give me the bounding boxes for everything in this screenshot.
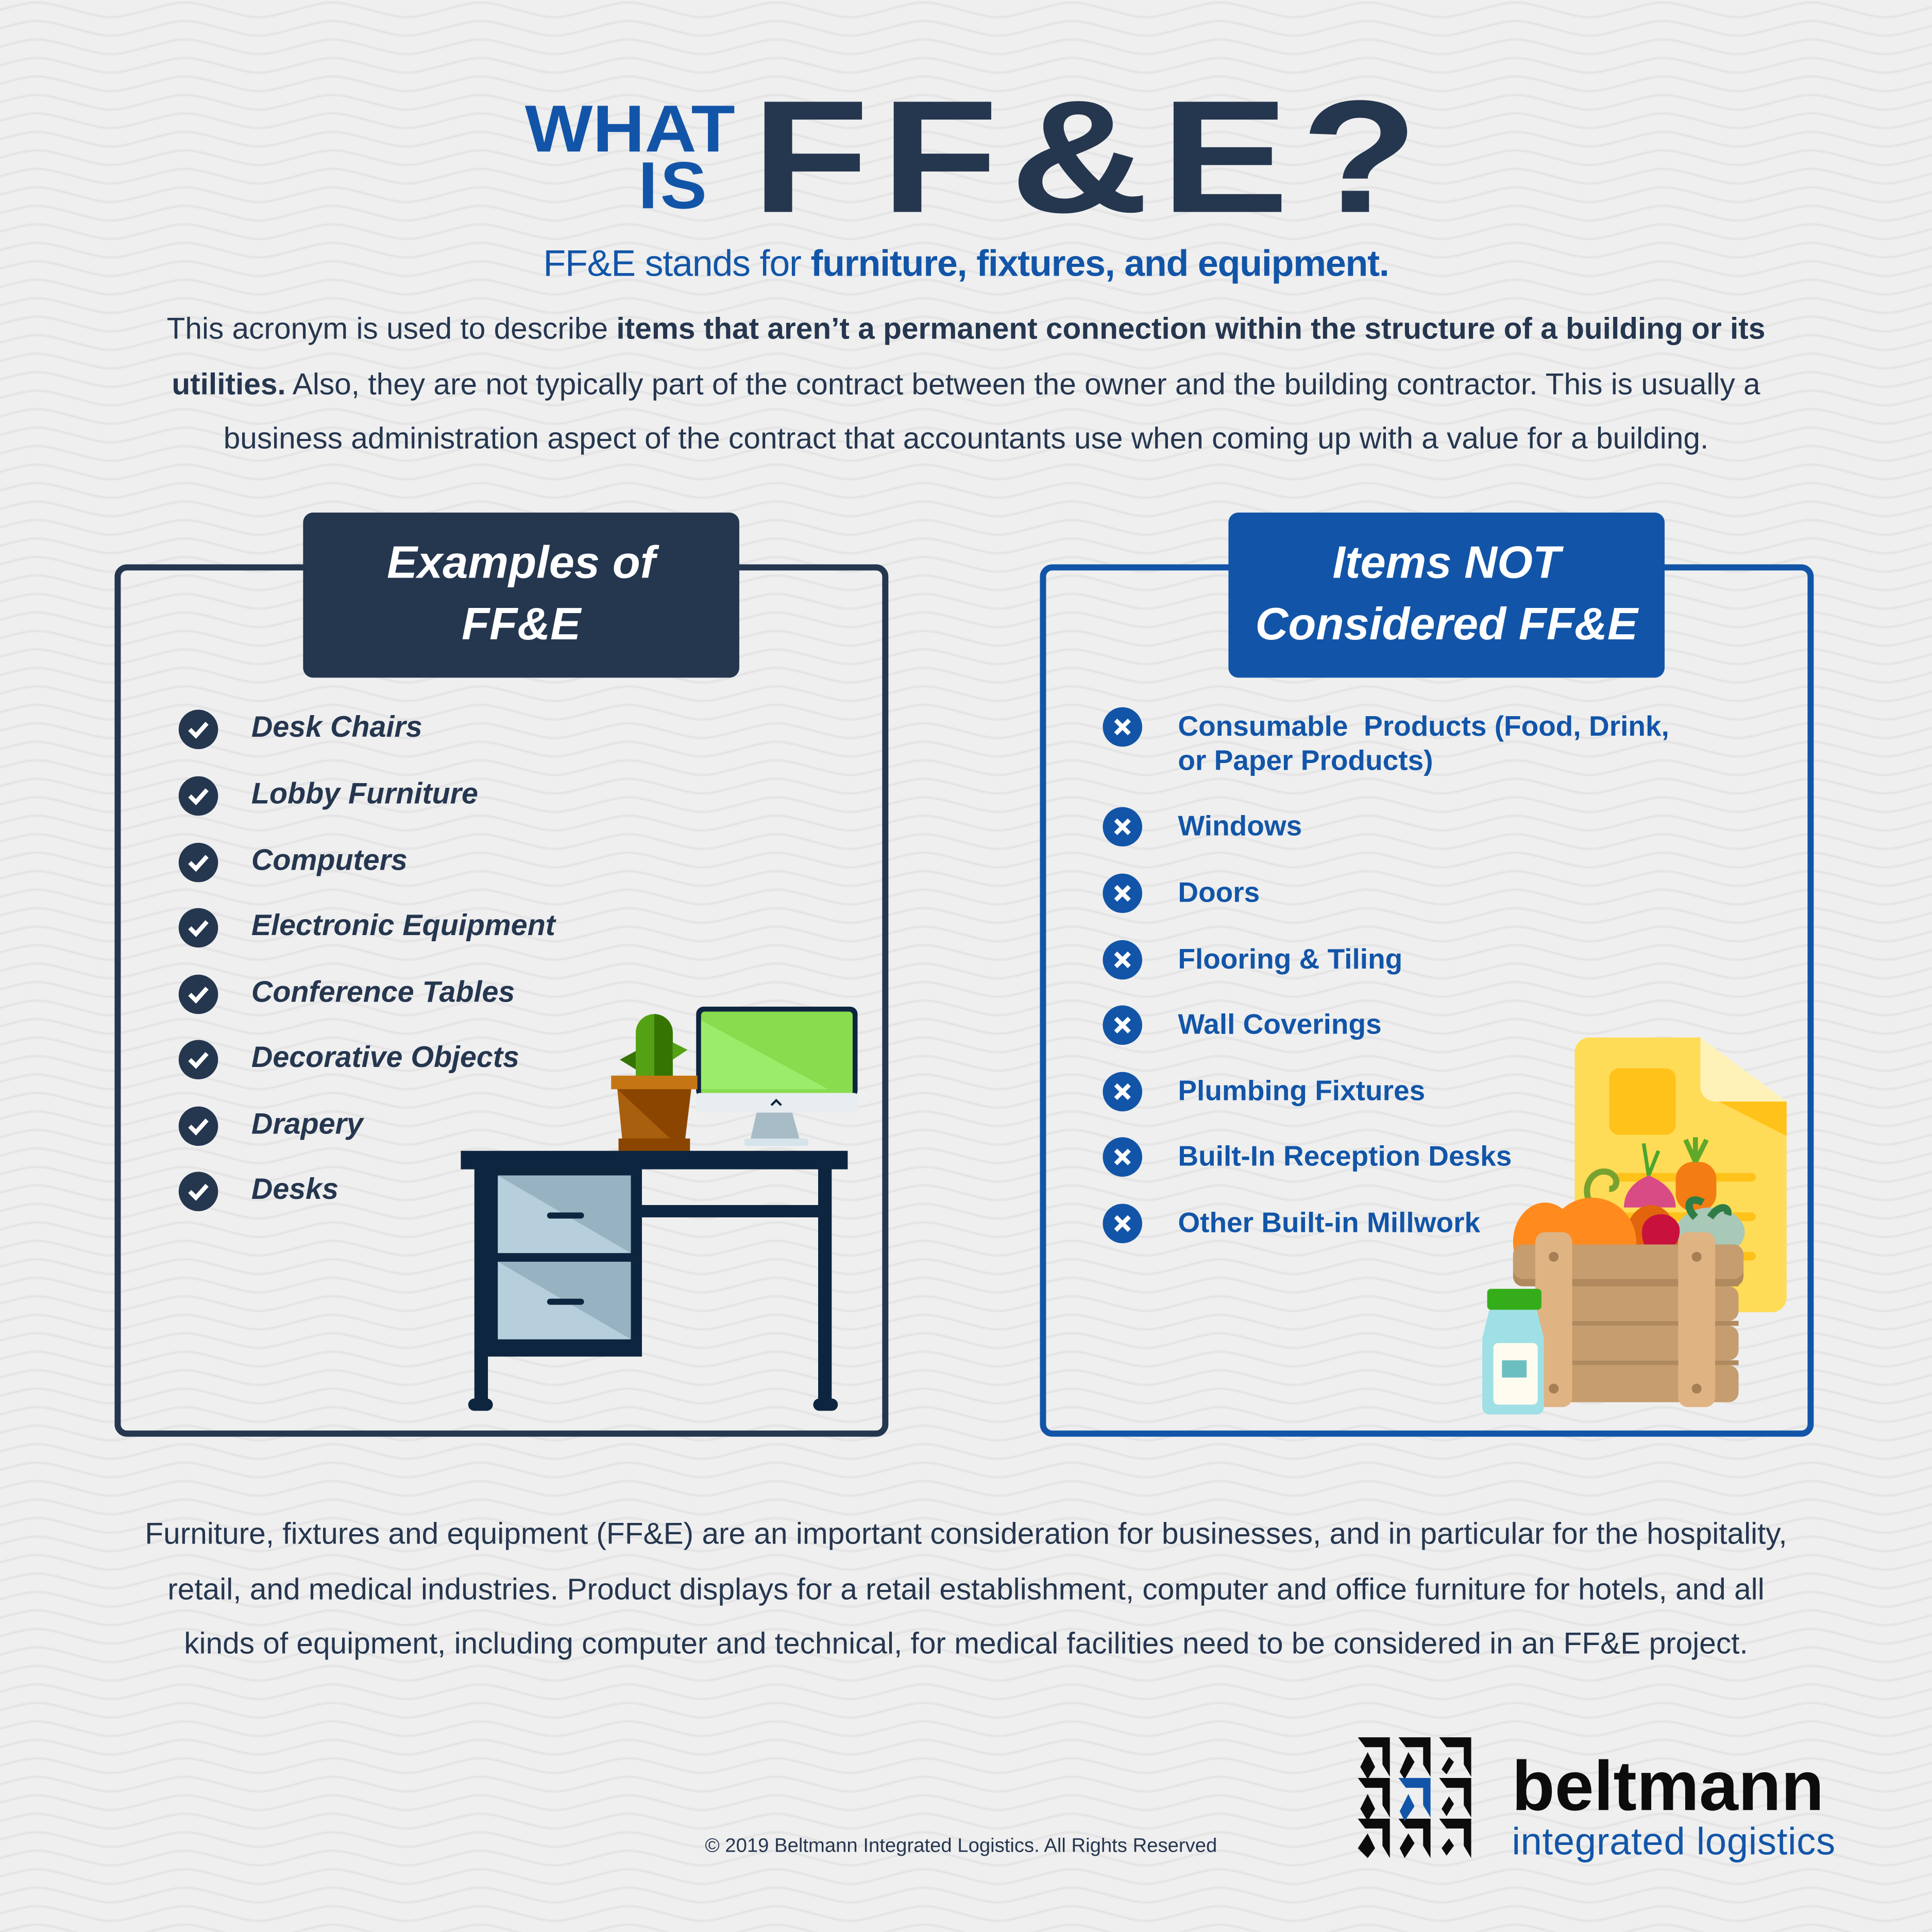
list: not FF&E: Doors [1178,876,1260,908]
title: WHAT IS [525,92,735,223]
title: WHAT IS: WHAT [525,92,735,166]
desk [461,1151,848,1411]
list: not FF&E: Wall Coverings [1178,1008,1382,1040]
copyright: © 2019 Beltmann Integrated Logistics. All Rights Reserved [705,1836,1217,1857]
illustration: food crate, milk and document [1482,1038,1787,1415]
list: not FF&E: Built-In Reception Desks [1178,1140,1512,1172]
intro paragraph: This acronym is used to describe items that aren’t a permanent connection within the structure of a building or its [167,313,1765,346]
list: not FF&E: Consumable Products (Food, Drink, [1178,710,1669,742]
list: examples [178,710,556,1211]
heading: Examples of FF&E: FF&E [462,599,581,649]
list: examples: Lobby Furniture [251,777,478,811]
intro paragraph [167,313,1765,456]
milk bottle [1482,1289,1544,1415]
vegetables [1513,1137,1744,1286]
title [525,66,1430,246]
closing paragraph [145,1518,1787,1661]
list: not FF&E: Windows [1178,809,1302,841]
list: examples: Drapery [251,1108,363,1141]
list: examples: Decorative Objects [251,1041,519,1074]
closing paragraph: retail, and medical industries. Product displays for a retail establishment, computer and office furniture for hotels, and all [167,1573,1765,1606]
crate [1513,1232,1743,1407]
panel: items not considered FF&E [1040,512,1814,1437]
list: examples: Computers [251,844,408,877]
panel: examples of FF&E [114,512,888,1437]
list: not FF&E [1103,707,1669,1244]
list: not FF&E: or Paper Products) [1178,744,1433,776]
logo wordmark: beltmann [1512,1747,1824,1826]
list: examples: Desk Chairs [251,711,422,744]
list: examples: Conference Tables [251,976,515,1009]
heading: Items NOT Considered FF&E: Considered FF&E [1255,599,1638,649]
title: FF&E?: FF&E? [752,66,1430,246]
list: examples: Electronic Equipment [251,909,555,943]
list: not FF&E: Other Built-in Millwork [1178,1206,1480,1239]
cactus plant [611,1014,698,1152]
logo: beltmann integrated logistics: integrated logistics [1512,1820,1836,1863]
document [1574,1038,1787,1312]
list: not FF&E: Plumbing Fixtures [1178,1074,1425,1107]
illustration: desk with plant and monitor [461,1007,858,1411]
title: WHAT IS: IS [638,149,709,223]
heading: Items NOT Considered FF&E [1228,513,1665,677]
monitor [696,1007,858,1146]
logo: beltmann integrated logistics [1358,1737,1836,1863]
list: not FF&E: Flooring & Tiling [1178,943,1402,975]
heading: Examples of FF&E [303,513,739,677]
list: examples: Desks [251,1173,338,1206]
subtitle: FF&E stands for furniture, fixtures, and equipment. [543,244,1389,284]
heading: Items NOT Considered FF&E: Items NOT [1332,537,1561,588]
intro paragraph: utilities. Also, they are not typically part of the contract between the owner and the building contractor. This is usually a [172,368,1760,401]
intro paragraph: business administration aspect of the contract that accountants use when coming up with a value for a building. [224,422,1708,456]
heading: Examples of FF&E: Examples of [387,537,655,588]
logo mark [1358,1737,1471,1858]
closing paragraph: kinds of equipment, including computer and technical, for medical facilities need to be considered in an FF&E project. [184,1628,1748,1661]
closing paragraph: Furniture, fixtures and equipment (FF&E) are an important consideration for businesses, and in particular for the hospitality, [145,1518,1787,1551]
